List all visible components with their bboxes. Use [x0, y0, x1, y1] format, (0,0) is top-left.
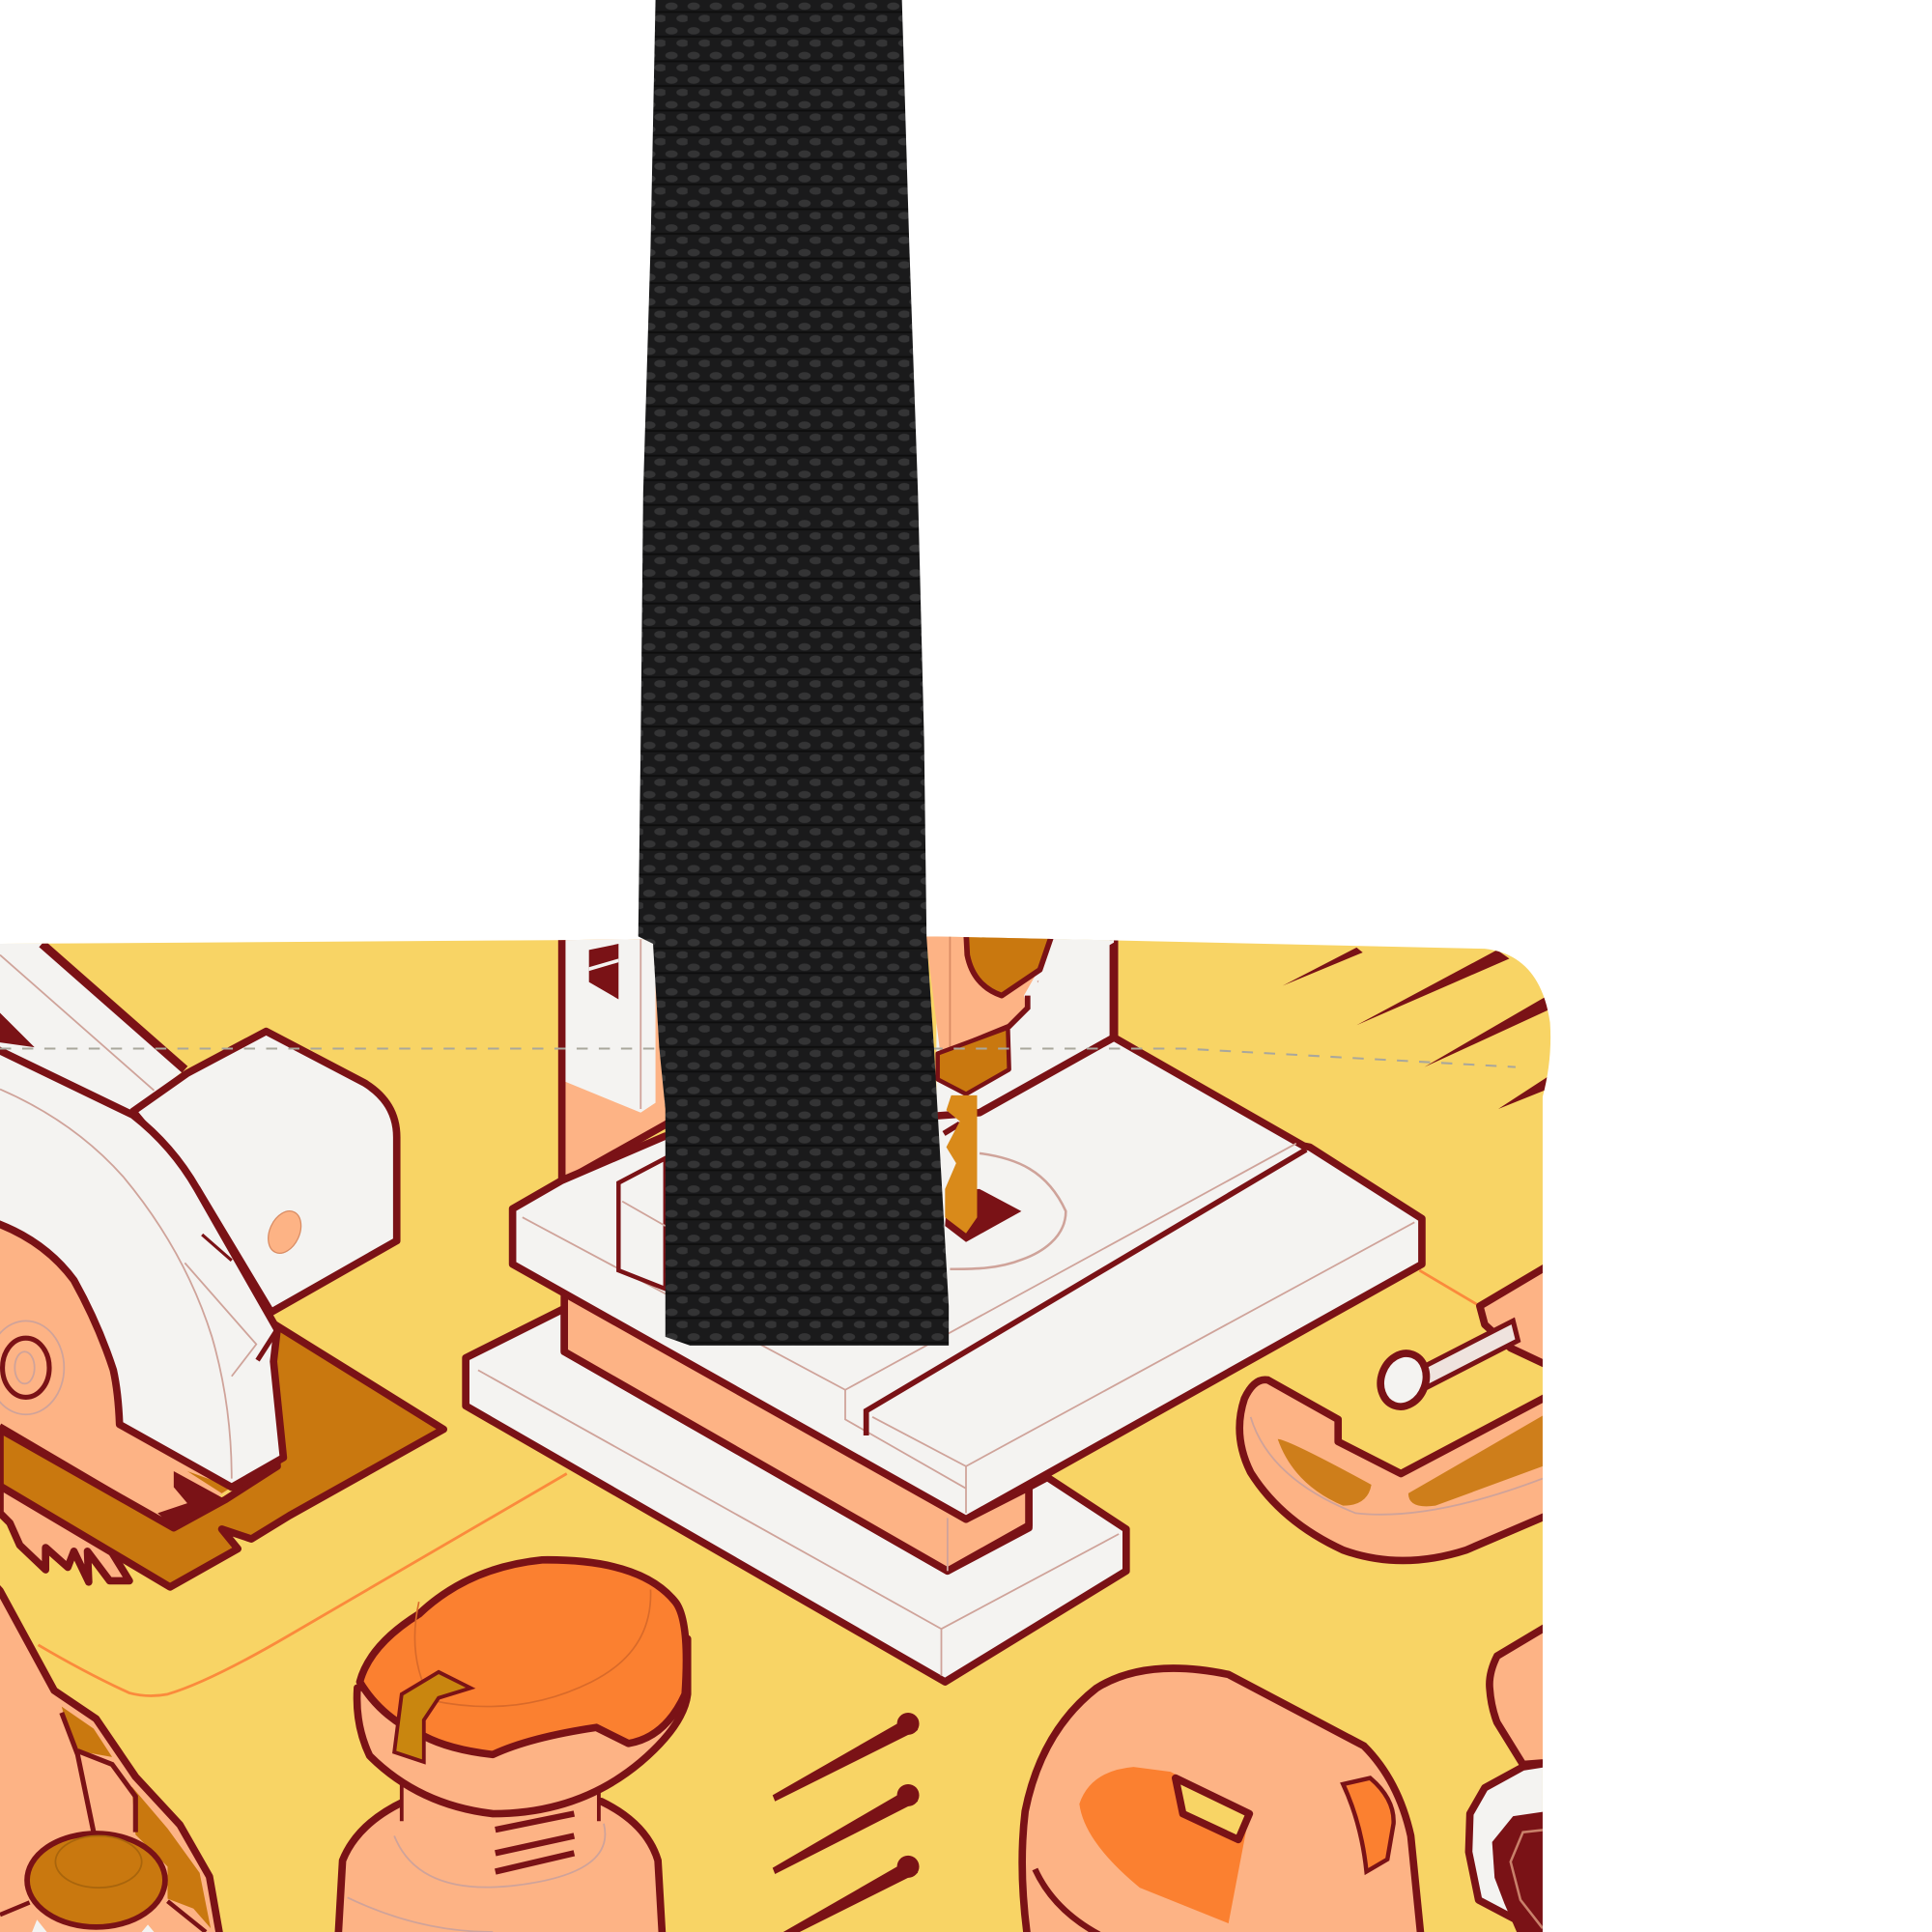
illustration: C clamp [1239, 1263, 1552, 1560]
right tool white ring [1468, 1762, 1555, 1932]
button screw bars [496, 1814, 574, 1872]
thin orange cable line [39, 1270, 1480, 1695]
blade hole [945, 1189, 1021, 1242]
saw blade [0, 1229, 228, 1517]
tool body [0, 1577, 222, 1932]
column back panel [562, 930, 671, 1182]
jigsaw body [925, 933, 1060, 1052]
saw blade notch [157, 1471, 222, 1524]
jigsaw gold block [938, 1028, 1009, 1094]
right tool dark core [1492, 1810, 1555, 1932]
base slab [466, 1309, 1126, 1682]
throat ring [950, 1153, 1065, 1269]
illustration: jigsaw on stand [466, 930, 1422, 1682]
illustration: orange button [337, 1560, 688, 1932]
illustration: mouse sander [1022, 1668, 1422, 1932]
saw box hole [268, 1210, 301, 1254]
saw motor box [133, 1032, 397, 1312]
tool gold knob [27, 1833, 165, 1927]
sander vent slot [1176, 1778, 1249, 1839]
inner clamp block [618, 1158, 666, 1289]
clamp upper arm [1480, 1263, 1552, 1368]
sander orange patch [1079, 1767, 1249, 1923]
table plate [513, 1037, 1422, 1520]
peach riser [564, 1288, 1029, 1571]
black woven strap [639, 0, 949, 1346]
button base [337, 1802, 663, 1932]
illustration: right edge tool [1468, 1622, 1555, 1932]
tool inner lines [62, 1713, 135, 1833]
illustration: lower left tool [0, 1577, 222, 1932]
illustration: nails top right [1283, 948, 1548, 1109]
jigsaw blade [945, 1095, 977, 1234]
clamp screw shaft [1417, 1321, 1518, 1387]
sander small vent [1343, 1778, 1394, 1872]
saw base plate [0, 1319, 443, 1587]
clamp screw head [1377, 1350, 1430, 1410]
jigsaw knob [966, 930, 1054, 996]
table slot line [867, 1150, 1306, 1435]
illustration: circular saw [0, 943, 443, 1587]
button cap [359, 1560, 686, 1754]
saw blade teeth [0, 1484, 129, 1582]
button gold tab [394, 1672, 470, 1762]
short table line behind blade [943, 1121, 959, 1136]
clamp hook [1239, 1379, 1552, 1560]
column right panel [936, 930, 1114, 1122]
button flange [357, 1638, 688, 1814]
stitching line [0, 1048, 1516, 1067]
illustration: nails bottom centre [773, 1713, 920, 1932]
saw top handle strip [0, 943, 185, 1112]
tool gold lower wedge [131, 1786, 211, 1928]
saw curved guard [0, 1045, 283, 1488]
saw blade bolt [0, 1321, 64, 1414]
sander body [1022, 1668, 1422, 1932]
right tool peach head [1490, 1622, 1555, 1765]
tool gold wedge [62, 1707, 112, 1757]
button neck [404, 1787, 597, 1806]
bag fabric panel [0, 936, 1551, 1932]
